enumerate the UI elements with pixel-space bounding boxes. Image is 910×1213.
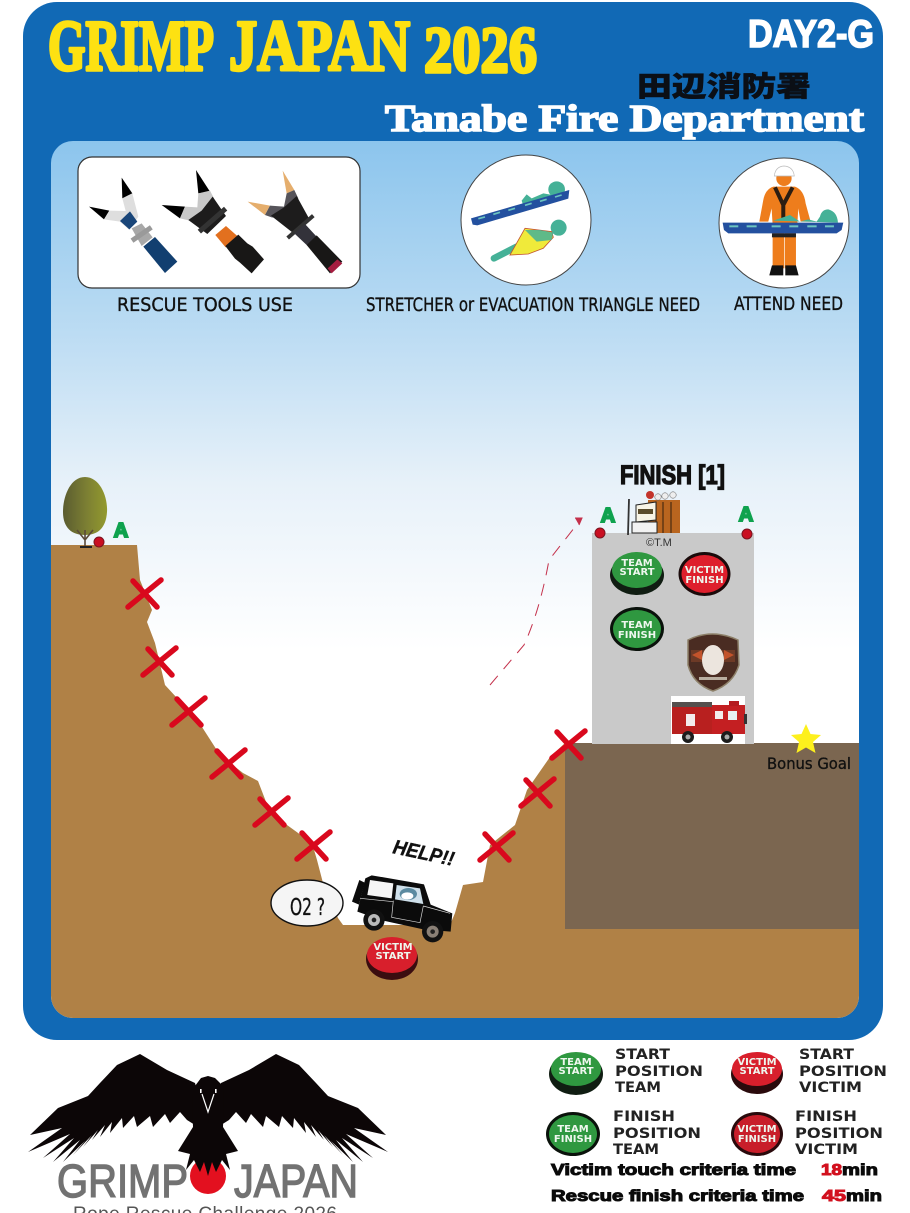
tools box xyxy=(78,157,360,288)
red x marks: left slope xyxy=(128,580,330,859)
anchor: left cliff: A xyxy=(114,520,128,542)
button: team start xyxy=(610,552,664,595)
legend: team start: POSITION xyxy=(615,1064,703,1080)
title xyxy=(48,6,537,87)
legend: victim finish: POSITION xyxy=(795,1126,883,1142)
criteria: victim touch xyxy=(551,1162,878,1179)
brown ground xyxy=(51,545,859,1018)
japanese department name: 田辺消防署 xyxy=(637,65,811,105)
button: victim finish xyxy=(678,552,730,596)
panel: rescue tools xyxy=(78,157,360,316)
legend: team finish: FINISH xyxy=(613,1109,675,1125)
legend: team start: START xyxy=(558,1066,594,1077)
legend: team finish: POSITION xyxy=(613,1126,701,1142)
legend: victim start: START xyxy=(799,1047,854,1063)
button: victim start: START xyxy=(375,951,411,962)
wall xyxy=(592,533,754,744)
button: team finish xyxy=(610,607,664,651)
anchor: building right xyxy=(739,504,753,539)
anchor: building left xyxy=(595,505,615,538)
legend: victim start: START xyxy=(739,1066,775,1077)
legend: victim start: VICTIM xyxy=(737,1057,777,1068)
legend: team start: START xyxy=(615,1047,670,1063)
button: victim finish: VICTIM xyxy=(685,565,724,576)
dark plateau block xyxy=(565,743,859,929)
day label: DAY2-G xyxy=(748,13,874,56)
button: victim start: VICTIM xyxy=(373,942,413,953)
criteria: rescue finish xyxy=(551,1188,882,1205)
red sun xyxy=(190,1158,226,1194)
header xyxy=(48,6,874,140)
button: team finish: TEAM xyxy=(621,620,653,631)
logo wordmark right: JAPAN xyxy=(234,1155,358,1207)
legend: team finish: TEAM xyxy=(557,1124,589,1135)
dashed route arrow xyxy=(490,518,582,685)
logo wordmark left: GRIMP xyxy=(57,1155,188,1207)
copyright: ©T.M xyxy=(646,537,672,549)
terrain xyxy=(51,545,859,1018)
criteria: rescue finish: min xyxy=(846,1188,882,1205)
crow body xyxy=(178,1076,238,1176)
button: team finish: FINISH xyxy=(618,630,656,641)
fire truck xyxy=(671,696,747,744)
callout: O2 bubble xyxy=(271,880,343,926)
icon: tree xyxy=(63,477,107,548)
text: bonus goal: Bonus Goal xyxy=(767,754,851,773)
circle xyxy=(461,155,591,285)
legend: team start xyxy=(549,1047,703,1096)
criteria: rescue finish: 45 xyxy=(822,1188,846,1205)
button: team start: START xyxy=(619,567,655,578)
title: 2026 xyxy=(424,14,537,87)
title: JAPAN xyxy=(229,6,410,86)
legend: victim finish: FINISH xyxy=(795,1109,857,1125)
team figures xyxy=(628,491,680,535)
legend: team finish: TEAM xyxy=(613,1142,659,1158)
criteria: victim touch: min xyxy=(842,1162,878,1179)
legend: victim start: POSITION xyxy=(799,1064,887,1080)
emblem badge xyxy=(688,634,739,691)
circle xyxy=(719,158,849,288)
legend xyxy=(546,1047,887,1205)
red x marks: right slope xyxy=(480,731,585,860)
crow wing right xyxy=(208,1054,388,1162)
legend: team finish xyxy=(546,1109,701,1158)
text: help: HELP!! xyxy=(391,836,456,871)
legend: team start: TEAM xyxy=(615,1080,661,1096)
legend: victim finish: VICTIM xyxy=(795,1142,858,1158)
legend: victim start xyxy=(731,1047,887,1096)
icon: stretcher and evacuation triangle xyxy=(471,181,569,258)
anchor: building right: A xyxy=(739,504,753,526)
icon: stranded jeep xyxy=(352,875,452,942)
button: victim start xyxy=(366,937,418,980)
criteria: victim touch: 18 xyxy=(821,1162,842,1179)
icon: rescuer with stretcher xyxy=(723,166,843,275)
icon: rescue tools xyxy=(89,170,342,273)
legend: victim finish: VICTIM xyxy=(737,1124,777,1135)
panel: stretcher or triangle xyxy=(366,155,700,316)
legend: victim finish xyxy=(731,1109,883,1158)
caption: attend: ATTEND NEED xyxy=(734,293,843,315)
criteria: rescue finish: Rescue finish criteria time xyxy=(551,1188,804,1205)
button: victim finish: FINISH xyxy=(685,575,724,586)
title: GRIMP xyxy=(48,6,214,86)
anchor: building left: A xyxy=(601,505,615,527)
button: team start: TEAM xyxy=(621,558,653,569)
sky scene panel xyxy=(51,141,859,1018)
anchor: left cliff xyxy=(94,520,128,547)
crow beak and eyes xyxy=(200,1089,217,1112)
callout: O2 bubble: O2 ? xyxy=(290,895,325,921)
legend: victim finish: FINISH xyxy=(738,1134,776,1145)
crow wing left xyxy=(28,1054,208,1162)
criteria: victim touch: Victim touch criteria time xyxy=(551,1162,796,1179)
icon: bonus star xyxy=(791,724,821,753)
panel: attend xyxy=(719,158,849,315)
caption: rescue tools: RESCUE TOOLS USE xyxy=(117,294,293,316)
building xyxy=(592,491,754,744)
legend: team finish: FINISH xyxy=(554,1134,592,1145)
caption: stretcher or triangle: STRETCHER or EVACUATION TRIANGLE NEED xyxy=(366,295,700,316)
logo: grimp japan xyxy=(28,1054,388,1213)
legend: team start: TEAM xyxy=(560,1057,592,1068)
department name: Tanabe Fire Department xyxy=(385,98,864,140)
legend: victim start: VICTIM xyxy=(799,1080,862,1096)
finish label: FINISH [1] xyxy=(620,460,725,490)
